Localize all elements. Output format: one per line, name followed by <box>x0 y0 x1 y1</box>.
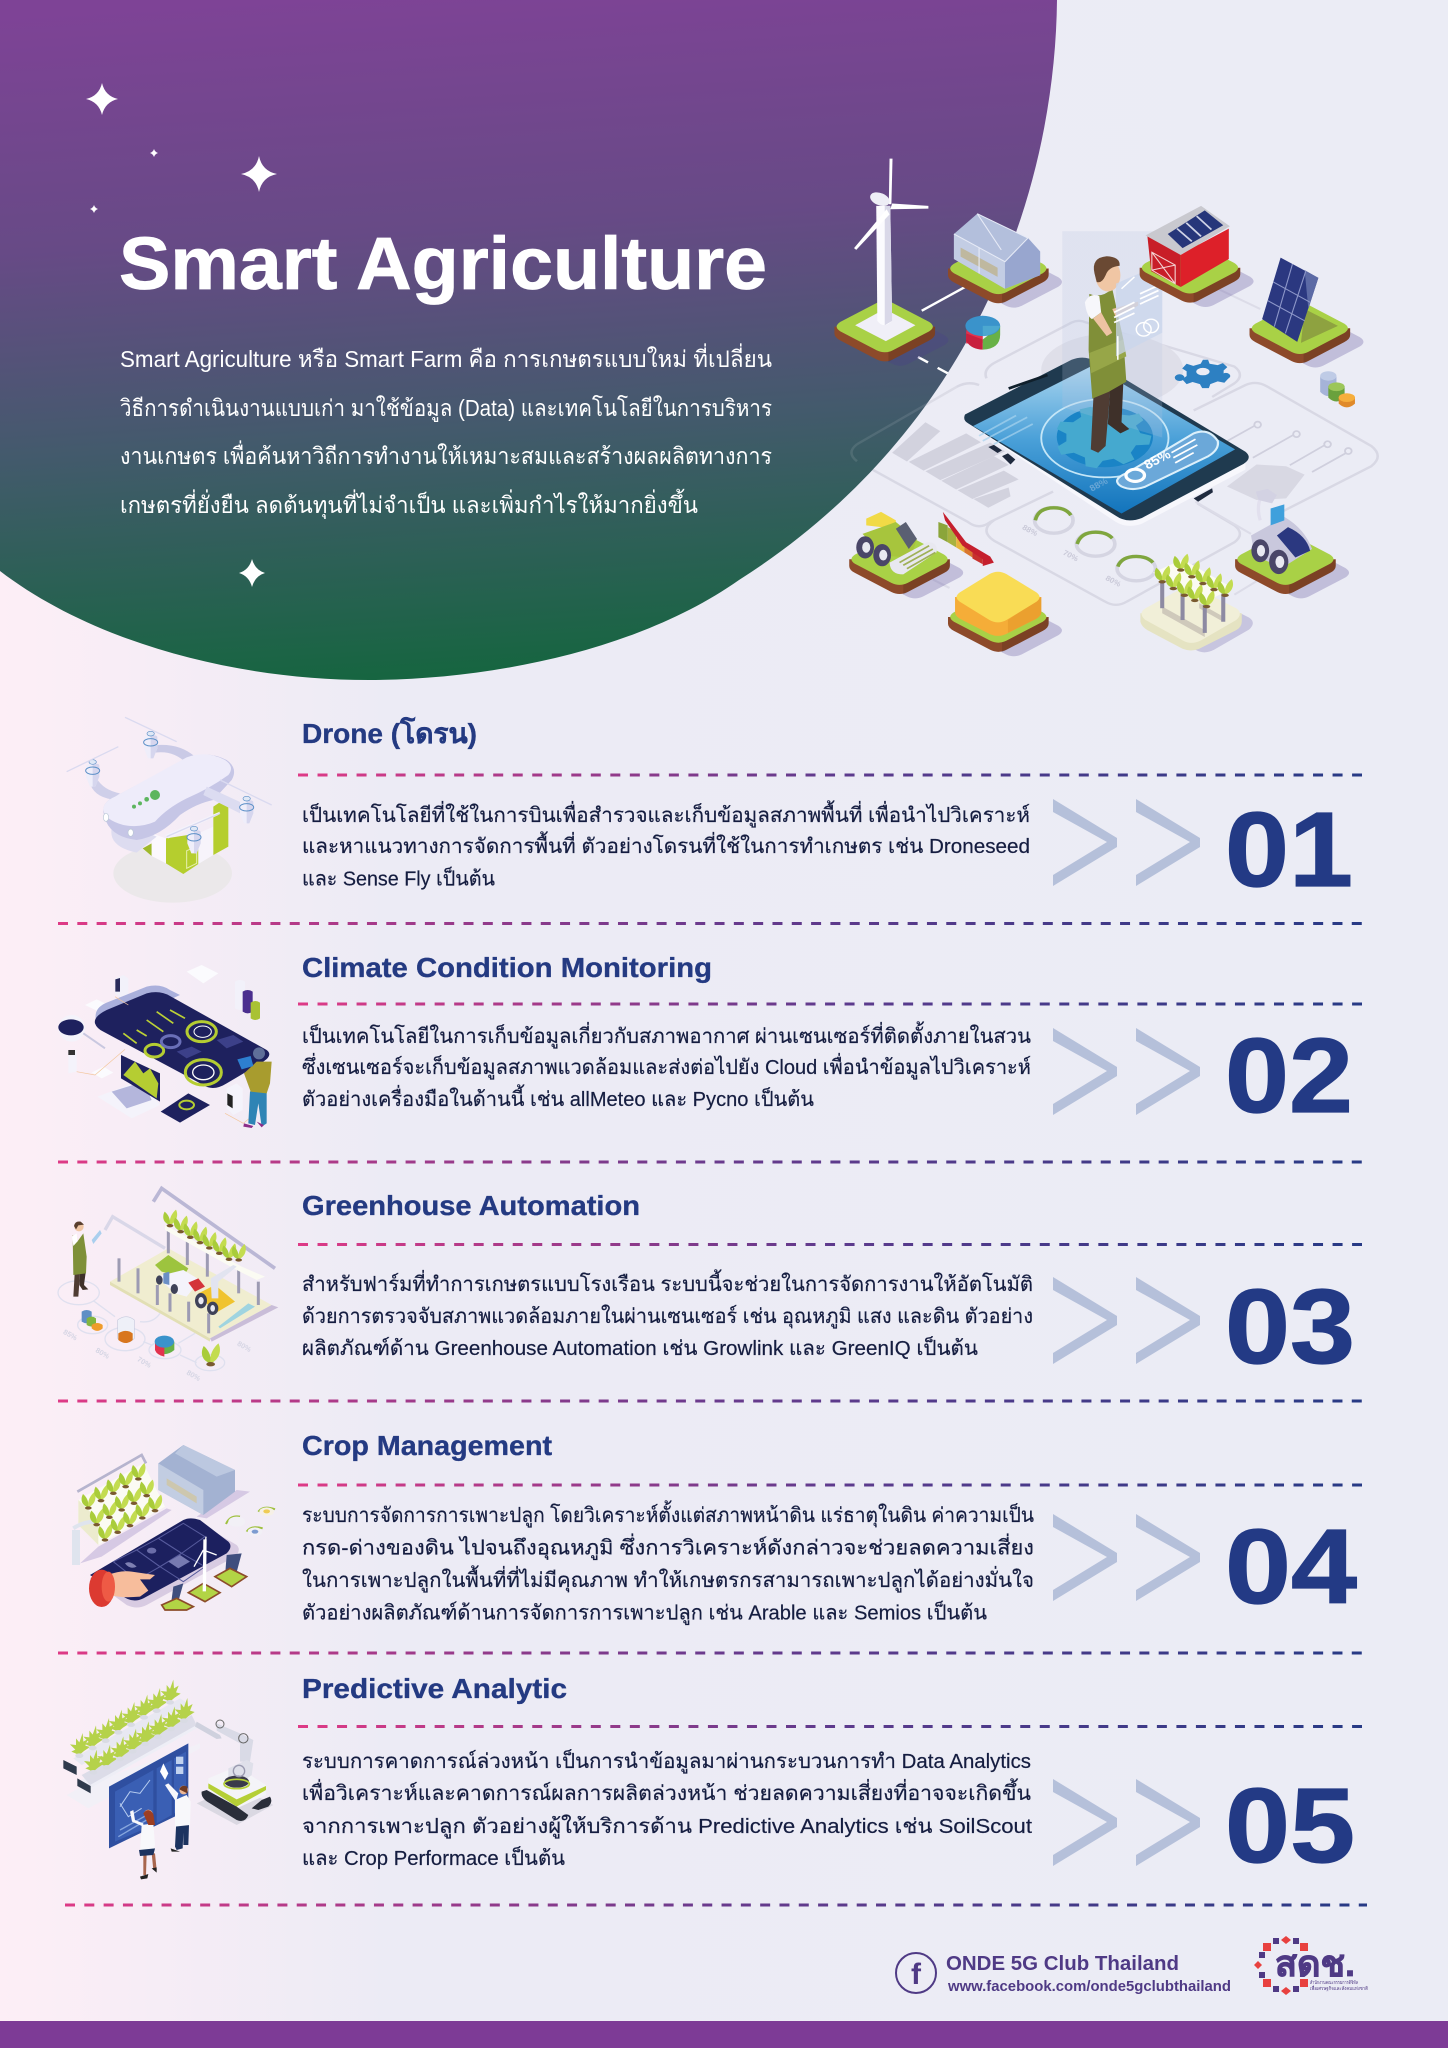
illustration: crop management tablet <box>73 1445 275 1610</box>
intro paragraph: Smart Agriculture หรือ Smart Farm คือ การเกษตรแบบใหม่ ที่เปลี่ยน <box>120 343 772 372</box>
number 01: 01 <box>1225 791 1353 909</box>
percent labels <box>62 1327 253 1383</box>
chevrons <box>1053 799 1200 886</box>
hero illustration: isometric smart farm <box>834 159 1363 656</box>
gauge labels: 70% <box>1061 548 1080 563</box>
tile: greenhouse <box>948 214 1062 308</box>
illustration: automated greenhouse <box>58 1188 278 1383</box>
intro paragraph <box>120 343 772 519</box>
body text: climate: ซึ่งเซนเซอร์จะเก็บข้อมูลสภาพแวดล้อมและส่งต่อไปยัง Cloud เพื่อนำข้อมูลไปวิเคราะห์ <box>302 1053 1031 1080</box>
tile: windmill <box>834 159 948 366</box>
title: Smart Agriculture <box>119 222 767 305</box>
phone: 88% <box>1088 476 1110 493</box>
small pie <box>965 316 1000 350</box>
tile: robot <box>1235 489 1349 598</box>
footer: url: www.facebook.com/onde5gclubthailand <box>947 1978 1231 1995</box>
tile: yellow block <box>948 572 1062 656</box>
faint panel line over blob <box>851 387 957 461</box>
heading: drone: Drone (โดรน) <box>302 716 477 749</box>
red arrow bar chart <box>938 512 994 566</box>
body text: crop: ในการเพาะปลูกในพื้นที่ที่ไม่มีคุณภาพ ทำให้เกษตรกรสามารถเพาะปลูกได้อย่างมั่นใจ <box>302 1565 1034 1593</box>
hologram column <box>1062 231 1162 437</box>
tile: hydroponic bed <box>1140 554 1253 652</box>
gauge labels: 88% <box>1021 523 1039 538</box>
body text: predictive <box>302 1747 1032 1870</box>
body text: predictive: จากการเพาะปลูก ตัวอย่างผู้ให้บริการด้าน Predictive Analytics เช่น SoilScout <box>302 1814 1032 1839</box>
body text: climate: เป็นเทคโนโลยีในการเก็บข้อมูลเกี่ยวกับสภาพอากาศ ผ่านเซนเซอร์ที่ติดตั้งภายในสวน <box>302 1021 1031 1049</box>
footer: facebook icon: f <box>911 1958 922 1991</box>
heading: crop: Crop Management <box>302 1430 552 1461</box>
farmer <box>1085 256 1138 453</box>
divider under heading <box>298 1484 1362 1486</box>
body text: predictive: เพื่อวิเคราะห์และคาดการณ์ผลการผลิตล่วงหน้า ช่วยลดความเสี่ยงที่อาจจะเกิดขึ้น <box>302 1778 1031 1805</box>
footer: ONDE logo: สดช. <box>1275 1943 1355 1984</box>
phone: 85% <box>1141 447 1173 472</box>
connector dashes <box>918 285 968 373</box>
body text: greenhouse: ผลิตภัณฑ์ด้าน Greenhouse Automation เช่น Growlink และ GreenIQ เป็นต้น <box>302 1334 978 1360</box>
tile: solar panel <box>1250 258 1363 368</box>
footer: club name: ONDE 5G Club Thailand <box>946 1953 1179 1975</box>
body text: climate: ตัวอย่างเครื่องมือในด้านนี้ เช่น allMeteo และ Pycno เป็นต้น <box>302 1084 814 1111</box>
body text: drone: เป็นเทคโนโลยีที่ใช้ในการบินเพื่อสำรวจและเก็บข้อมูลสภาพพื้นที่ เพื่อนำไปวิเคราะห์ <box>302 800 1030 828</box>
body text: greenhouse: ด้วยการตรวจจับสภาพแวดล้อมภายในผ่านเซนเซอร์ เช่น อุณหภูมิ แสง และดิน ตัวอย่าง <box>302 1304 1033 1329</box>
body text: crop: ระบบการจัดการการเพาะปลูก โดยวิเคราะห์ตั้งแต่สภาพหน้าดิน แร่ธาตุในดิน ค่าความเป็น <box>302 1500 1034 1528</box>
section 4: Crop Management <box>73 1430 1362 1626</box>
section 3: Greenhouse Automation <box>58 1188 1362 1386</box>
phone <box>964 358 1305 526</box>
divider under heading <box>298 1002 1362 1006</box>
network outline panels <box>851 321 1378 605</box>
heading: greenhouse: Greenhouse Automation <box>302 1190 640 1221</box>
body text: drone: และ Sense Fly เป็นต้น <box>302 864 495 890</box>
divider under heading <box>298 1243 1362 1246</box>
footer: ONDE logo: เพื่อเศรษฐกิจและสังคมแห่งชาติ <box>1310 1985 1368 1992</box>
body text: predictive: ระบบการคาดการณ์ล่วงหน้า เป็นการนำข้อมูลมาผ่านกระบวนการทำ Data Analytics <box>302 1747 1031 1774</box>
header purple-green blob <box>0 0 1057 680</box>
heading: climate: Climate Condition Monitoring <box>302 952 712 983</box>
footer: facebook icon <box>896 1953 936 1993</box>
heading: predictive: Predictive Analytic <box>302 1673 567 1704</box>
chevrons <box>1053 1028 1200 1115</box>
data coins <box>1320 371 1355 407</box>
body text: crop: กรด-ด่างของดิน ไปจนถึงอุณหภูมิ ซึ่งการวิเคราะห์ดังกล่าวจะช่วยลดความเสี่ยง <box>302 1534 1034 1560</box>
gear <box>1175 360 1230 388</box>
pie behind farmer <box>1041 333 1183 406</box>
illustration: drone <box>67 717 272 903</box>
footer purple bar <box>0 2021 1448 2048</box>
number 04: 04 <box>1225 1508 1357 1626</box>
footer: ONDE logo: สำนักงานคณะกรรมการดิจิทัล <box>1310 1979 1358 1986</box>
body text: greenhouse <box>302 1269 1033 1360</box>
gauge labels: 80% <box>1104 574 1123 589</box>
data coins and jar <box>82 1310 174 1357</box>
divider under heading <box>298 1725 1362 1728</box>
body text: crop: ตัวอย่างผลิตภัณฑ์ด้านการจัดการการเพาะปลูก เช่น Arable และ Semios เป็นต้น <box>302 1598 987 1626</box>
farmer <box>72 1222 102 1297</box>
hologram screen <box>1114 263 1162 360</box>
illustration: climate dashboard <box>58 965 272 1128</box>
grey bar chart <box>892 422 1019 508</box>
body text: predictive: และ Crop Performace เป็นต้น <box>302 1844 565 1870</box>
illustration: hydroponics and scientists <box>63 1680 273 1879</box>
percent labels: 85% <box>62 1327 79 1343</box>
chevrons <box>1053 1277 1200 1364</box>
body text: drone <box>302 800 1030 890</box>
intro paragraph: วิธีการดำเนินงานแบบเก่า มาใช้ข้อมูล (Data) และเทคโนโลยีในการบริหาร <box>120 395 772 422</box>
body text: drone: และหาแนวทางการจัดการพื้นที่ ตัวอย่างโดรนที่ใช้ในการทำเกษตร เช่น Droneseed <box>302 831 1030 858</box>
number 03: 03 <box>1225 1268 1355 1386</box>
percent labels: 80% <box>185 1368 203 1383</box>
percent labels: 70% <box>136 1355 153 1370</box>
donut gauges <box>1035 507 1156 581</box>
number 05: 05 <box>1225 1767 1355 1885</box>
section 5: Predictive Analytic <box>63 1673 1362 1885</box>
footer: ONDE logo <box>1254 1936 1368 1995</box>
tile: barn <box>1140 206 1254 307</box>
section 2: Climate Condition Monitoring <box>58 952 1362 1135</box>
percent labels: 80% <box>94 1346 112 1361</box>
gauge labels <box>1021 523 1123 589</box>
chevrons <box>1053 1514 1200 1601</box>
body text: greenhouse: สำหรับฟาร์มที่ทำการเกษตรแบบโรงเรือน ระบบนี้จะช่วยในการจัดการงานให้อัตโนมัติ <box>302 1269 1033 1296</box>
number 02: 02 <box>1225 1017 1353 1135</box>
divider under heading <box>298 774 1362 776</box>
sparkle stars <box>86 83 277 587</box>
chevrons <box>1053 1779 1200 1866</box>
body text: climate <box>302 1021 1031 1111</box>
percent labels: 80% <box>236 1339 253 1354</box>
wires on right panel <box>1221 422 1352 472</box>
section 1: Drone <box>67 716 1362 909</box>
body text: crop <box>302 1500 1034 1626</box>
intro paragraph: เกษตรที่ยั่งยืน ลดต้นทุนที่ไม่จำเป็น และเพิ่มกำไรให้มากยิ่งขึ้น <box>120 489 698 519</box>
tile: harvester <box>849 512 963 598</box>
intro paragraph: งานเกษตร เพื่อค้นหาวิถีการทำงานให้เหมาะสมและสร้างผลผลิตทางการ <box>120 440 772 469</box>
